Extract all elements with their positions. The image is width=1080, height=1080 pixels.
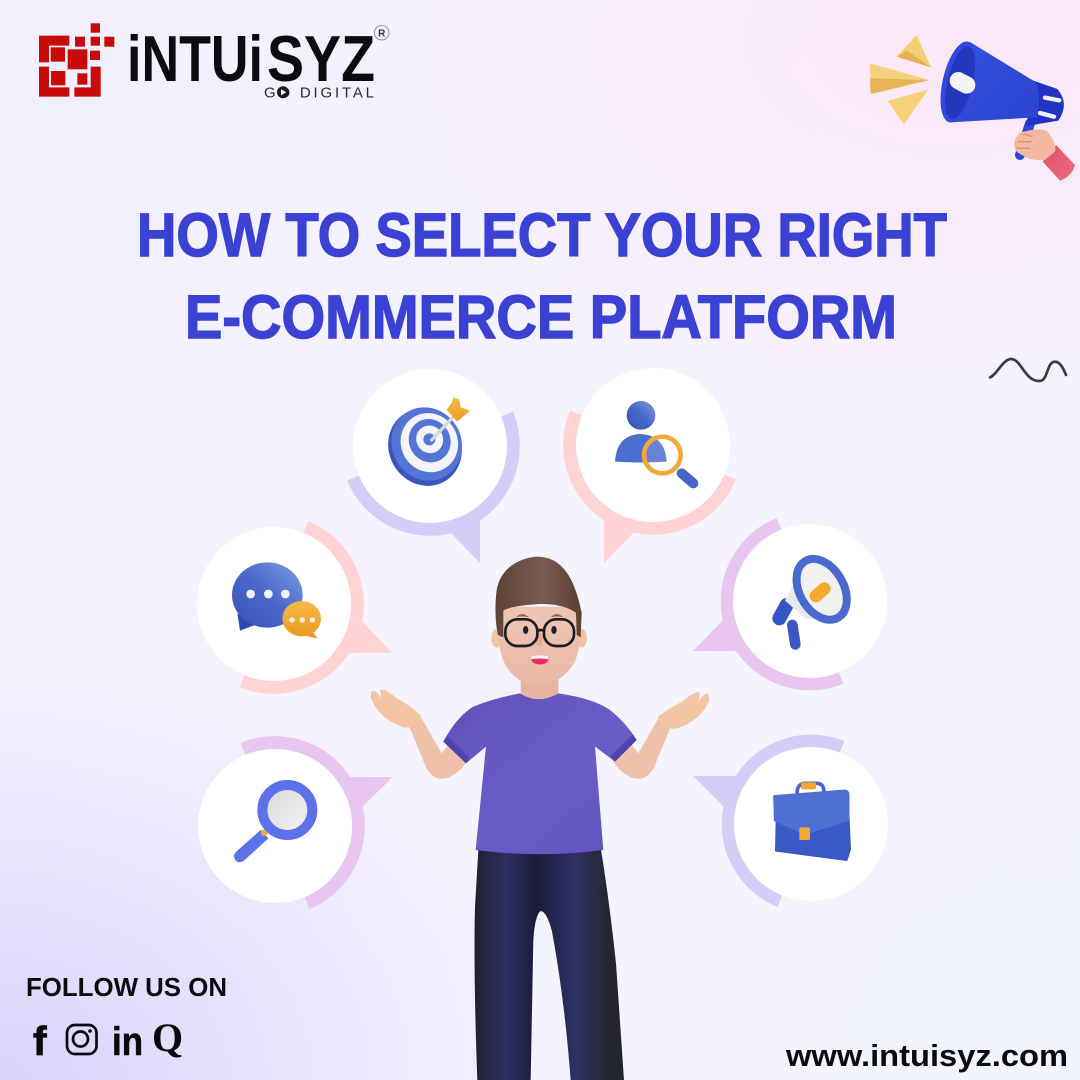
bubble ring [693,524,841,684]
megaphone driver [958,81,967,85]
upper body [371,557,709,854]
icon: chat bubbles [232,562,321,639]
registered mark: R [378,28,386,40]
neck [521,673,558,702]
icon: instagram [67,1025,96,1054]
sleeve cuffs [443,735,637,763]
white circle [733,524,887,678]
title line 2: E-COMMERCE PLATFORM [185,283,897,351]
logo wordmark: iNTUi [127,22,263,95]
right arm [612,692,709,779]
white circle [734,747,888,901]
registered mark [374,25,389,40]
ears [491,629,587,648]
sound triangles [870,35,931,124]
icon: quora: Q [152,1015,183,1060]
follow us heading: FOLLOW US ON [26,972,227,1002]
hand [1014,129,1055,160]
bubble ring [243,743,393,903]
white circle [198,749,352,903]
trousers [475,850,624,1080]
nose [536,632,543,647]
bubble: target [353,369,513,563]
megaphone mouth [939,43,981,122]
bubble: megaphone [693,524,887,684]
icon: megaphone [779,550,857,644]
face [499,607,579,685]
bubble ring [570,413,730,563]
icon: facebook: f [33,1018,47,1064]
bubble: chat [197,527,392,687]
sleeve [1043,145,1075,181]
icon: target [374,394,476,499]
eyes [523,626,557,634]
megaphone illustration with hand [870,35,1075,181]
icon: magnifying glass [234,785,312,862]
icon: briefcase [774,782,850,860]
mouth [530,655,549,664]
megaphone back [1027,80,1064,126]
logo [39,22,389,102]
eyebrows [516,614,563,617]
squiggle [990,359,1066,381]
hair [495,557,582,637]
bubble: search [198,743,393,903]
bubble: briefcase [693,741,888,901]
megaphone rim [934,38,984,126]
character [371,557,709,1080]
t-shirt [443,693,637,854]
left arm [371,689,468,779]
logo tagline: GO DIGITAL [264,85,374,102]
icon: linkedin: in [112,1020,143,1064]
follow us block [26,972,227,1064]
hand handle [1020,123,1030,155]
white circle [197,527,351,681]
bubble ring [353,414,513,563]
icon: person with magnifier [615,401,693,483]
white circle [353,369,507,523]
title [137,201,947,351]
megaphone cone [950,42,1039,122]
bubble ring [242,527,392,687]
glasses [505,619,574,646]
logo mark [39,23,114,97]
bubble ring [693,741,842,901]
title: HOW TO SELECT YOUR RIGHT [137,201,947,269]
white circle [576,368,730,522]
logo wordmark end: SYZ [267,22,375,95]
website url: www.intuisyz.com [785,1038,1068,1073]
bubble: person search [570,368,730,563]
